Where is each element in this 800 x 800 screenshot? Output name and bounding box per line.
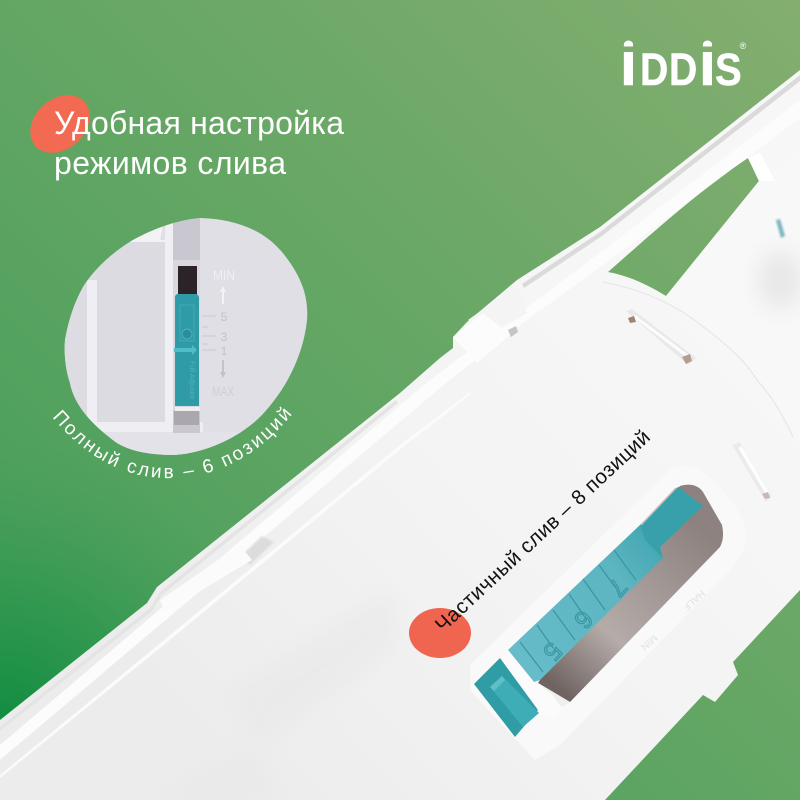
white slot between button and scale xyxy=(500,650,562,720)
teal adjustment scale xyxy=(508,487,703,682)
scale numbers: 5 xyxy=(537,637,567,666)
curved caption: full flush: Полный слив – 6 позиций xyxy=(53,406,292,478)
upper slot xyxy=(626,309,696,365)
logo: iDDiS: S xyxy=(715,45,742,96)
lower slot xyxy=(732,442,772,502)
slider channel xyxy=(173,215,200,433)
logo: iDDiS: i xyxy=(699,29,716,99)
rounded head outline of the cylinder xyxy=(603,282,793,437)
mechanism inside window xyxy=(538,683,570,708)
scale marks: MAX xyxy=(212,383,234,399)
logo: iDDiS: i xyxy=(620,29,637,99)
scale marks: MIN xyxy=(213,267,235,283)
teal indicator: Full Adjustor xyxy=(188,361,195,400)
scale numbers: 7 xyxy=(602,573,632,602)
scale marks: 1 xyxy=(221,344,228,358)
clip on the rail xyxy=(453,285,527,363)
teal slider button xyxy=(474,658,539,737)
scale ticks xyxy=(520,550,636,672)
logo: iDDiS: D xyxy=(640,44,668,95)
inset base xyxy=(60,210,315,460)
rear part of the mechanism xyxy=(666,150,800,440)
heading: режимов слива xyxy=(54,145,286,181)
scale numbers: 6 xyxy=(568,605,598,634)
heading: Удобная настройка xyxy=(54,105,344,141)
embossed scale labels xyxy=(638,587,707,652)
scale numbers xyxy=(537,573,632,666)
red accent behind heading xyxy=(19,83,101,165)
teal indicator xyxy=(174,294,199,406)
raised rim around the window xyxy=(470,466,746,760)
caption: partial flush: Частичный слив – 8 позиций xyxy=(431,425,655,637)
heading xyxy=(54,105,344,181)
embossed scale labels: MIN xyxy=(638,632,659,652)
logo: iDDiS: D xyxy=(669,44,697,95)
scale marks: 3 xyxy=(221,330,228,344)
logo: iDDiS: ® xyxy=(740,41,747,51)
left frame xyxy=(64,223,241,455)
logo: iDDiS xyxy=(624,40,746,86)
embossed scale labels: HALF xyxy=(680,587,707,612)
window opening xyxy=(538,485,723,702)
scale marks: 5 xyxy=(221,310,228,324)
circular inset: full flush scale xyxy=(64,218,308,455)
red accent behind partial flush caption xyxy=(409,608,471,658)
scale marks xyxy=(202,267,235,399)
